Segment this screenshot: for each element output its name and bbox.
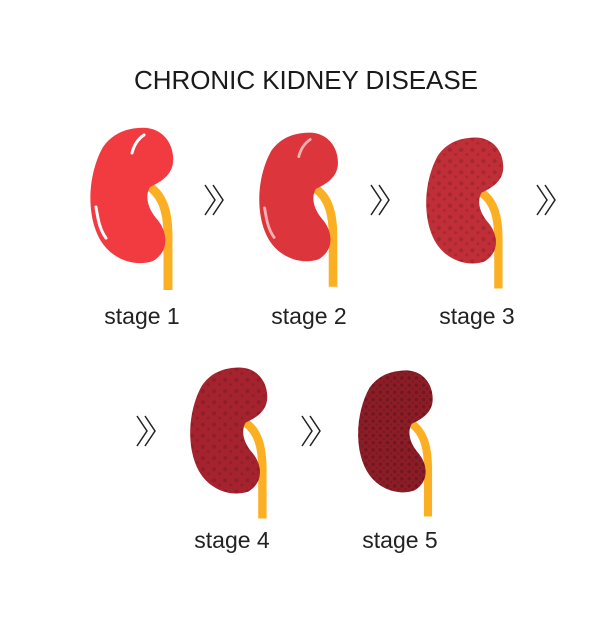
arrow 3 <box>537 185 555 215</box>
label stage 4: stage 4 <box>194 527 270 553</box>
label stage 2: stage 2 <box>271 303 347 329</box>
kidney: stage 5 <box>358 370 433 516</box>
label stage 5: stage 5 <box>362 527 438 553</box>
kidney: stage 3 <box>426 138 503 288</box>
kidney: stage 1 <box>90 128 173 290</box>
label stage 3: stage 3 <box>439 303 515 329</box>
arrow 4 <box>137 416 155 446</box>
label stage 1: stage 1 <box>104 303 180 329</box>
arrow 2 <box>371 185 389 215</box>
kidney: stage 2 <box>259 133 338 287</box>
arrow 1 <box>205 185 223 215</box>
kidney: stage 4 <box>190 368 267 518</box>
title: CHRONIC KIDNEY DISEASE <box>134 65 478 95</box>
arrow 5 <box>302 416 320 446</box>
